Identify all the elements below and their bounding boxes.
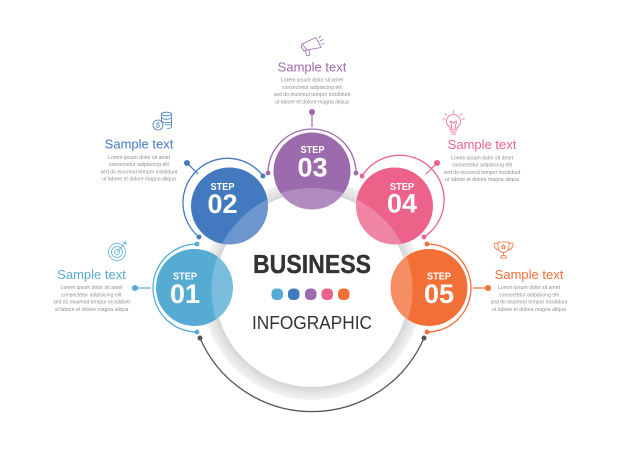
- text block 02: Sample text: [105, 136, 174, 152]
- text block 05: [491, 267, 568, 313]
- icon: megaphone: [301, 36, 324, 56]
- text block 02: sed do eiusmod tempor incididunt: [101, 169, 178, 175]
- step 04: [356, 154, 445, 244]
- text block 05: ut labore et dolore magna aliqua: [492, 307, 566, 313]
- text block 03: Lorem ipsum dolor sit amet: [281, 78, 344, 84]
- icon: trophy: [494, 242, 513, 258]
- icon: light bulb: [442, 110, 464, 134]
- step 05: 05: [424, 279, 454, 309]
- icon: target: [108, 241, 127, 260]
- text block 02: ut labore et dolore magna aliqua: [102, 177, 176, 183]
- text block 01: Lorem ipsum dolor sit amet: [60, 285, 123, 291]
- text block 01: [53, 267, 131, 313]
- step 02: [182, 158, 268, 244]
- text block 01: sed do eiusmod tempor incididunt: [53, 300, 131, 306]
- text block 04: consectetur adipisicing elit: [452, 163, 513, 169]
- text block 04: [444, 137, 521, 183]
- step 03: 03: [297, 152, 328, 182]
- text block 03: ut labore et dolore magna aliqua: [275, 99, 349, 105]
- text block 01: ut labore et dolore magna aliqua: [55, 307, 129, 313]
- text block 02: [101, 136, 178, 183]
- step 05: STEP: [427, 272, 451, 282]
- text block 03: Sample text: [278, 60, 347, 74]
- text block 05: Lorem ipsum dolor sit amet: [498, 285, 561, 291]
- text block 04: Sample text: [448, 137, 517, 152]
- bottom dark arc: [198, 336, 426, 412]
- text block 04: sed do eiusmod tempor incididunt: [444, 170, 521, 176]
- colour dots: [272, 288, 350, 300]
- text block 01: Sample text: [57, 267, 126, 282]
- step 01: STEP: [173, 272, 197, 282]
- title: BUSINESS: BUSINESS: [253, 249, 371, 279]
- step 03: [266, 109, 358, 210]
- icon: coins: $: [156, 122, 160, 130]
- central grey ring: [208, 186, 416, 394]
- text block 02: Lorem ipsum dolor sit amet: [108, 155, 171, 161]
- step 02: 02: [207, 189, 238, 219]
- text block 03: [274, 60, 351, 105]
- text block 03: consectetur adipisicing elit: [282, 85, 343, 91]
- text block 03: sed do eiusmod tempor incididunt: [274, 92, 351, 98]
- step 02: STEP: [210, 182, 235, 193]
- text block 02: consectetur adipisicing elit: [109, 162, 170, 168]
- step 04: 04: [387, 188, 417, 218]
- text block 05: Sample text: [495, 267, 564, 282]
- text block 04: Lorem ipsum dolor sit amet: [451, 155, 514, 161]
- subtitle: INFOGRAPHIC: INFOGRAPHIC: [252, 312, 372, 333]
- step 01: [132, 242, 233, 334]
- text block 01: consectetur adipisicing elit: [61, 292, 122, 298]
- text block 05: consectetur adipisicing elit: [499, 292, 560, 298]
- step 01: 01: [170, 279, 200, 309]
- step 04: STEP: [390, 182, 414, 193]
- icon: coins: [153, 112, 172, 130]
- text block 05: sed do eiusmod tempor incididunt: [491, 300, 568, 306]
- step 03: STEP: [300, 145, 325, 156]
- step 05: [390, 242, 491, 334]
- text block 04: ut labore et dolore magna aliqua: [445, 177, 519, 183]
